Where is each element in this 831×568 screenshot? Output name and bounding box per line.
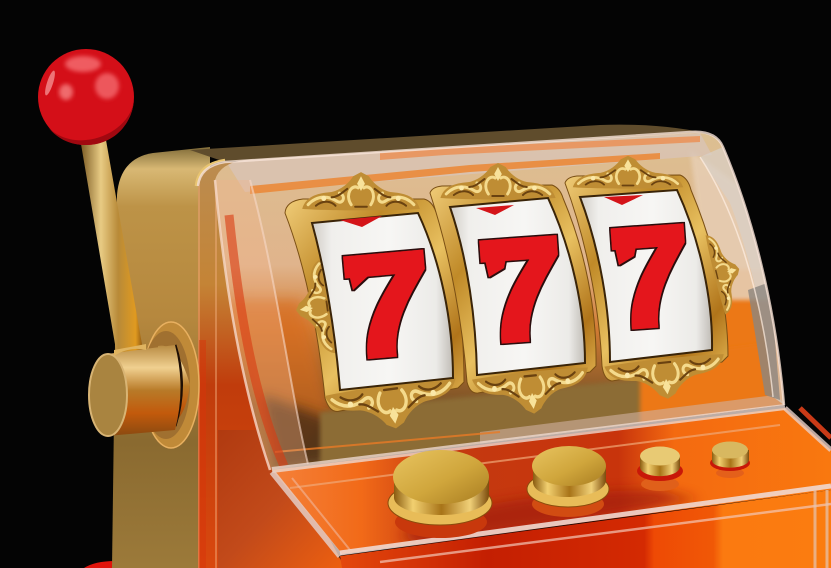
reel 3 ornaments [573,156,749,405]
deck right glass edge [785,408,831,450]
deck left glass edge [272,472,340,556]
reel 2 ornaments [440,163,592,420]
button 4 [710,442,750,478]
reel 1 seven: 7 [337,221,438,388]
red floor reflection [84,561,115,568]
button 3 [637,446,683,491]
right glass band [700,147,784,405]
lever collar [114,344,146,356]
lever flange [142,322,199,448]
reel 2 [430,163,596,420]
reel 2 upper symbol [476,205,514,215]
lever [38,49,199,448]
reel 3 drum [580,190,712,362]
lever end cap [89,354,127,436]
reel 3 upper symbol [604,195,643,205]
gold cabinet body [112,125,705,568]
reel 1 [285,172,464,438]
lever stick [81,140,143,356]
control deck [272,407,831,556]
upper glass bands [225,133,712,192]
reel 3 gold frame [565,175,728,381]
reel 1 gold frame [285,199,464,411]
reel 1 upper symbol [340,216,382,227]
lever ball [38,49,134,145]
transparent cover edges [198,132,784,470]
reel 2 seven: 7 [474,208,569,373]
reel 3 seven: 7 [606,197,696,358]
glass side panel [198,162,345,568]
cover interior [200,125,800,475]
reel 2 gold frame [430,185,596,393]
reel 3 [565,156,749,405]
front panel [340,486,831,568]
reel 2 drum [450,198,585,375]
reel 1 drum [312,213,453,390]
reel 1 ornaments [289,172,461,438]
button 1 [388,450,492,538]
lever hub cylinder [107,345,180,436]
button 2 [527,446,609,517]
deck rear glass edge [272,407,785,470]
